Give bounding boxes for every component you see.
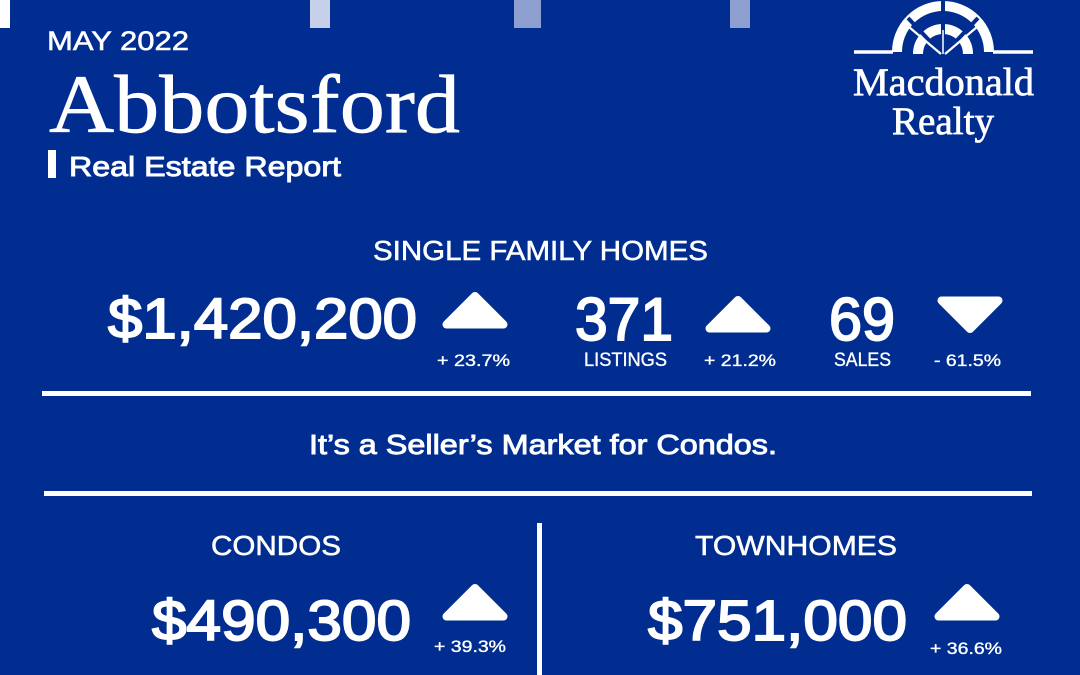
stat: single family listings [575, 286, 776, 371]
heading: townhomes: TOWNHOMES [695, 530, 897, 561]
stat: single family sales: - 61.5% [934, 351, 1001, 370]
heading: single family homes: SINGLE FAMILY HOMES [373, 235, 708, 266]
stat: single family sales [829, 286, 1001, 371]
title: Abbotsford [49, 58, 460, 150]
stat: townhome price: + 36.6% [930, 639, 1002, 658]
logo: Macdonald Realty: Realty [892, 100, 994, 143]
subtitle: Real Estate Report [69, 151, 341, 182]
icon: up arrow [446, 588, 504, 616]
top tabs [0, 0, 750, 28]
stat: condo price [152, 588, 506, 656]
stat: single family sales: SALES [834, 350, 891, 371]
heading: condos: CONDOS [211, 530, 341, 561]
stat: single family price: $1,420,200 [108, 287, 417, 351]
stat: single family listings: + 21.2% [704, 351, 776, 370]
date label: MAY 2022 [47, 26, 189, 56]
icon: up arrow [446, 296, 504, 324]
icon: up arrow [938, 588, 996, 616]
stat: single family listings: LISTINGS [584, 350, 667, 371]
stat: townhome price: $751,000 [648, 589, 907, 653]
stat: single family listings: 371 [575, 286, 673, 353]
stat: townhome price [648, 588, 1002, 658]
stat: single family sales: 69 [829, 286, 895, 353]
logo: Macdonald Realty [853, 0, 1035, 143]
stat: condo price: $490,300 [152, 589, 411, 653]
stat: condo price: + 39.3% [434, 637, 506, 656]
logo: Macdonald Realty: Macdonald [853, 61, 1035, 104]
stat: single family price: + 23.7% [437, 351, 510, 370]
icon: down arrow [942, 300, 998, 329]
stat: single family price [108, 287, 510, 370]
market statement: It’s a Seller’s Market for Condos. [309, 429, 777, 460]
icon: up arrow [710, 300, 766, 328]
